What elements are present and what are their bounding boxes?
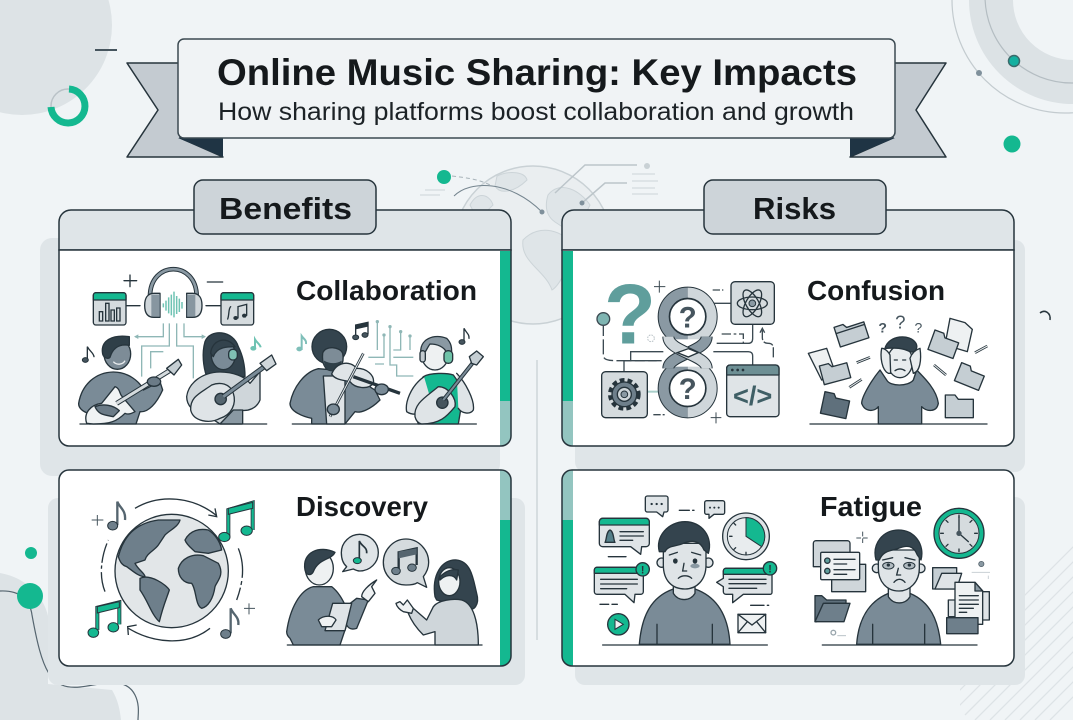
window: bars xyxy=(93,293,126,325)
ribbon: left tail xyxy=(127,63,223,157)
woman xyxy=(396,560,478,645)
illustration: globe with music notes xyxy=(88,499,482,645)
panel: benefits header xyxy=(59,180,511,250)
big question mark: ? xyxy=(604,267,656,362)
subtitle: How sharing platforms boost collaboration and growth xyxy=(218,98,854,126)
question marks in loops xyxy=(679,301,697,406)
musician with electric guitar xyxy=(79,336,182,424)
tired person right xyxy=(857,530,941,644)
window: notes xyxy=(221,293,254,325)
tired person left xyxy=(639,522,730,644)
heading: Confusion: Confusion xyxy=(807,275,945,306)
panel: fatigue xyxy=(562,470,1014,666)
heading: Discovery: Discovery xyxy=(296,491,429,522)
illustration: notification overload: ! xyxy=(768,563,772,575)
notification bubbles xyxy=(594,496,777,603)
background decoration: top left xyxy=(0,0,117,123)
heading: Collaboration: Collaboration xyxy=(296,275,477,306)
panel: risks header xyxy=(562,180,1014,250)
speech bubble: gray note xyxy=(383,539,429,587)
cycle arrows xyxy=(92,499,255,641)
headphones xyxy=(145,269,202,317)
title: Online Music Sharing: Key Impacts xyxy=(217,52,857,93)
illustration: figure-eight flow xyxy=(597,267,987,424)
heading: Fatigue: Fatigue xyxy=(820,491,922,522)
stacked windows and folders xyxy=(813,541,989,634)
ribbon: right tail xyxy=(850,63,946,157)
background decoration: bottom left xyxy=(0,547,138,720)
background globe and connection lines xyxy=(420,163,658,640)
globe xyxy=(115,514,228,628)
clock xyxy=(934,508,984,558)
illustration: notification overload xyxy=(594,496,990,645)
small arc mark xyxy=(1040,311,1050,320)
code window xyxy=(727,365,779,417)
node xyxy=(597,313,610,325)
confused person: ? xyxy=(878,320,887,336)
background decoration: bottom right hatching xyxy=(960,546,1073,720)
panel: collaboration xyxy=(59,250,511,446)
heading: Benefits: Benefits xyxy=(219,191,352,226)
illustration: notification overload: ! xyxy=(641,564,644,576)
question marks in loops: ? xyxy=(679,301,697,334)
folders and paperclips xyxy=(808,318,987,419)
clock with green sector xyxy=(723,513,769,560)
figure eight loops xyxy=(663,293,712,412)
music notes around globe xyxy=(88,502,253,638)
musician in green shirt xyxy=(406,336,483,424)
code window: </> xyxy=(733,381,772,411)
soft panel shadows xyxy=(40,238,1025,685)
illustration: musicians and headphones xyxy=(79,269,483,424)
confused person xyxy=(862,311,938,424)
atom box xyxy=(731,282,774,324)
connector lines xyxy=(603,281,773,423)
speech bubble: green note xyxy=(341,534,378,572)
envelope xyxy=(738,614,766,633)
musician with acoustic guitar and headphones xyxy=(187,333,276,424)
man with tablet xyxy=(287,549,377,645)
panel: confusion xyxy=(562,250,1014,446)
gear box xyxy=(602,372,647,418)
play button xyxy=(608,614,629,635)
confused person: ? xyxy=(914,320,922,336)
notes near violinist xyxy=(296,322,469,351)
violinist xyxy=(290,329,400,424)
confused person: ? xyxy=(895,311,906,332)
question marks in loops: ? xyxy=(679,373,697,406)
background decoration: top right xyxy=(952,0,1073,152)
musical notes xyxy=(82,339,261,362)
title banner xyxy=(178,39,895,138)
heading: Risks: Risks xyxy=(753,191,836,226)
panel: discovery xyxy=(59,470,511,666)
